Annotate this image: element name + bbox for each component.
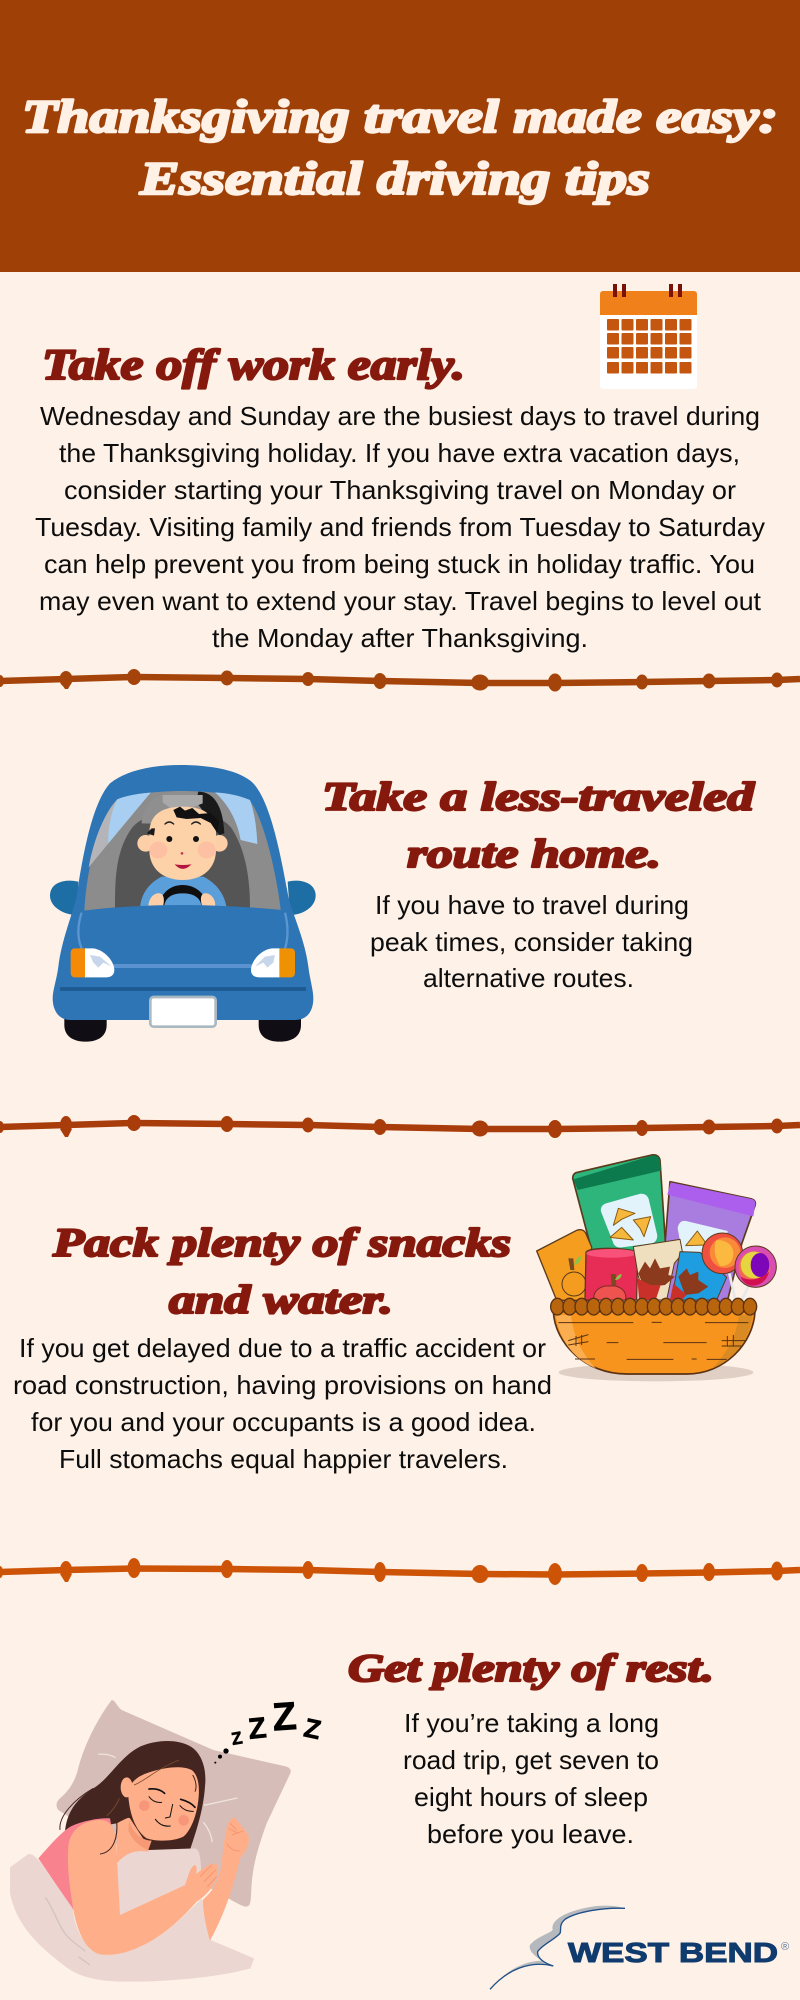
body text: rest: before you leave. <box>427 1819 634 1849</box>
body text: take off work early: Wednesday and Sunday are the busiest days to travel during <box>40 401 760 431</box>
body text: rest: eight hours of sleep <box>414 1782 648 1812</box>
body text: less-traveled route: peak times, consider taking <box>370 927 693 957</box>
header banner <box>0 0 800 272</box>
heading: take a less-traveled route home <box>322 774 755 876</box>
body text: take off work early: may even want to extend your stay. Travel begins to level out <box>39 586 762 616</box>
title <box>22 91 778 205</box>
snore letters <box>230 1694 324 1749</box>
body text: take off work early: the Thanksgiving holiday. If you have extra vacation days, <box>59 438 740 468</box>
panel: get plenty of rest <box>10 1647 789 1989</box>
body text: take off work early: Tuesday. Visiting family and friends from Tuesday to Saturday <box>35 512 765 542</box>
snore letters: Z <box>301 1713 324 1745</box>
body text: take off work early: consider starting your Thanksgiving travel on Monday or <box>64 475 736 505</box>
body text: snacks: road construction, having provisions on hand <box>13 1370 552 1400</box>
body text: take off work early <box>35 401 765 653</box>
body text: less-traveled route: alternative routes. <box>423 963 634 993</box>
logo: West Bend: WEST BEND <box>568 1937 778 1968</box>
heading: take a less-traveled route home: Take a less-traveled <box>322 774 755 819</box>
heading: take a less-traveled route home: route home. <box>407 831 661 876</box>
title: Thanksgiving travel made easy: <box>22 91 778 143</box>
snore letters: Z <box>271 1694 298 1740</box>
body text: snacks <box>13 1333 552 1474</box>
icon: sleeping woman <box>10 1694 324 1982</box>
body text: less-traveled route <box>370 890 693 993</box>
body text: rest: If you’re taking a long <box>404 1708 659 1738</box>
heading: get plenty of rest: Get plenty of rest. <box>348 1647 714 1690</box>
heading: pack plenty of snacks and water <box>52 1220 511 1322</box>
logo: West Bend: ® <box>781 1941 789 1953</box>
snore letters: Z <box>247 1711 268 1746</box>
body text: take off work early: can help prevent you from being stuck in holiday traffic. You <box>44 549 755 579</box>
heading: pack plenty of snacks and water: and water. <box>169 1277 393 1322</box>
title: Essential driving tips <box>139 153 650 205</box>
body text: less-traveled route: If you have to travel during <box>375 890 689 920</box>
icon: calendar <box>600 284 697 389</box>
icon: snack basket <box>537 1155 776 1381</box>
panel: pack plenty of snacks and water <box>13 1155 776 1474</box>
body text: snacks: Full stomachs equal happier travelers. <box>59 1444 508 1474</box>
body text: rest: road trip, get seven to <box>403 1745 659 1775</box>
body text: take off work early: the Monday after Thanksgiving. <box>212 623 588 653</box>
panel: take a less-traveled route home <box>50 765 755 1042</box>
body text: rest <box>403 1708 659 1849</box>
body text: snacks: If you get delayed due to a traffic accident or <box>19 1333 546 1363</box>
body text: snacks: for you and your occupants is a good idea. <box>31 1407 536 1437</box>
logo: West Bend <box>490 1906 789 1989</box>
heading: pack plenty of snacks and water: Pack plenty of snacks <box>52 1220 511 1265</box>
snore letters: Z <box>230 1727 244 1749</box>
heading: take off work early: Take off work early. <box>42 342 465 389</box>
panel: take off work early <box>35 284 765 653</box>
icon: car with driver <box>50 765 316 1042</box>
